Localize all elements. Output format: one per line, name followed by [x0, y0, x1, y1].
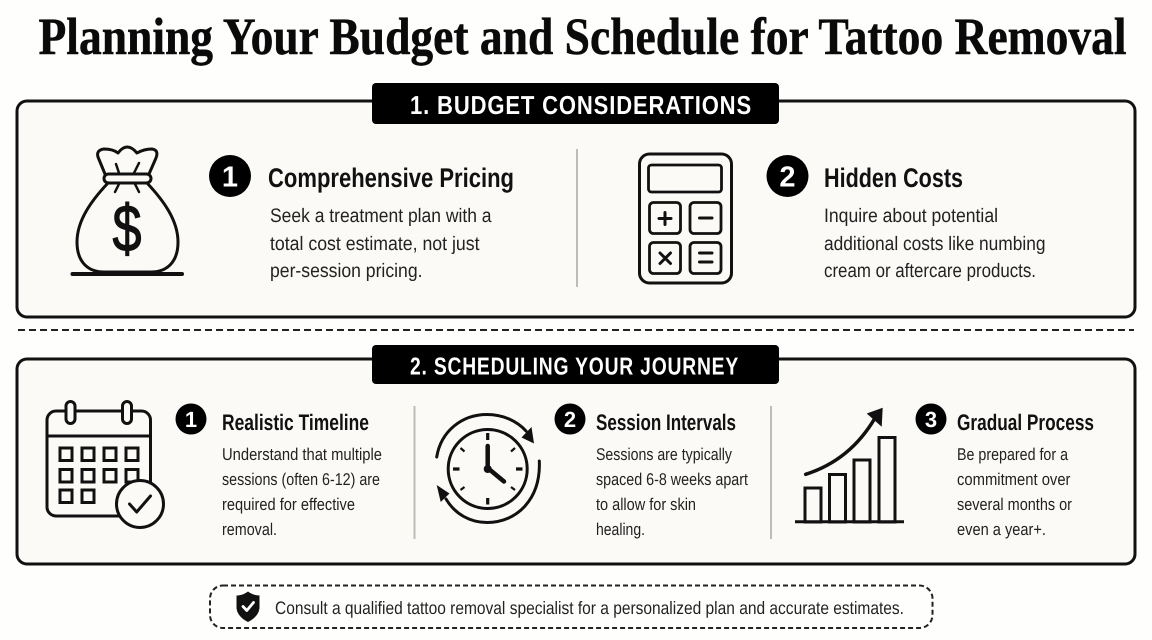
body: realistic timeline: removal.: [222, 520, 277, 539]
icon: rising bar chart: [795, 408, 904, 522]
number badge 1: [176, 404, 206, 434]
body: gradual process: even a year+.: [957, 520, 1046, 539]
heading: gradual process: Gradual Process: [957, 410, 1094, 435]
section header: scheduling: 2. SCHEDULING YOUR JOURNEY: [410, 354, 739, 380]
body: gradual process: several months or: [957, 495, 1072, 514]
number badge 2: 2: [564, 407, 576, 432]
body: realistic timeline: required for effective: [222, 495, 355, 514]
body: session intervals: healing.: [596, 520, 645, 539]
body: gradual process: Be prepared for a: [957, 445, 1068, 464]
body: session intervals: spaced 6-8 weeks apart: [596, 470, 748, 489]
panel: scheduling your journey: [17, 345, 1135, 564]
body: gradual process: commitment over: [957, 470, 1071, 489]
heading: comprehensive pricing: Comprehensive Pricing: [268, 163, 514, 193]
body: hidden costs: additional costs like numbing: [824, 233, 1046, 255]
number badge 1: 1: [185, 407, 197, 432]
section header: scheduling: [372, 345, 779, 384]
callout: consult a specialist: [210, 586, 932, 628]
number badge 2: [554, 404, 586, 434]
item: session intervals: [554, 404, 748, 539]
body: realistic timeline: sessions (often 6-12) are: [222, 470, 380, 489]
icon: calculator: [640, 154, 732, 283]
body: comprehensive pricing: per-session pricing.: [270, 260, 422, 282]
section header: budget: 1. BUDGET CONSIDERATIONS: [410, 90, 752, 120]
body: session intervals: Sessions are typically: [596, 445, 732, 464]
number badge 1: [209, 155, 251, 197]
number badge 3: 3: [925, 407, 937, 432]
heading: hidden costs: Hidden Costs: [824, 163, 963, 193]
number badge 2: 2: [779, 162, 796, 194]
icon: money bag: [70, 147, 184, 276]
icon: calendar with check: [47, 402, 164, 528]
icon: money bag: $: [112, 191, 142, 265]
body: comprehensive pricing: [270, 205, 492, 282]
body: hidden costs: [824, 205, 1046, 282]
heading: session intervals: Session Intervals: [596, 410, 736, 435]
body: gradual process: [957, 445, 1072, 539]
body: realistic timeline: [222, 445, 382, 539]
item: comprehensive pricing: [209, 155, 514, 282]
item: realistic timeline: [176, 404, 382, 539]
body: session intervals: to allow for skin: [596, 495, 696, 514]
icon: clock with cycle arrows: [437, 414, 539, 522]
body: comprehensive pricing: total cost estimate, not just: [270, 233, 480, 255]
item: gradual process: [916, 404, 1094, 539]
body: hidden costs: Inquire about potential: [824, 205, 998, 227]
body: session intervals: [596, 445, 748, 539]
item: hidden costs: [766, 155, 1046, 282]
icon: shield with check: [236, 592, 260, 622]
body: hidden costs: cream or aftercare products.: [824, 260, 1036, 282]
panel: budget considerations: [17, 83, 1135, 317]
section header: budget: [372, 83, 779, 124]
number badge 2: [766, 155, 808, 197]
number badge 1: 1: [222, 162, 238, 194]
number badge 3: [916, 404, 946, 434]
body: comprehensive pricing: Seek a treatment plan with a: [270, 205, 492, 227]
callout text: Consult a qualified tattoo removal specialist for a personalized plan and accurate estimates.: [275, 598, 904, 618]
body: realistic timeline: Understand that multiple: [222, 445, 382, 464]
heading: realistic timeline: Realistic Timeline: [222, 410, 369, 435]
